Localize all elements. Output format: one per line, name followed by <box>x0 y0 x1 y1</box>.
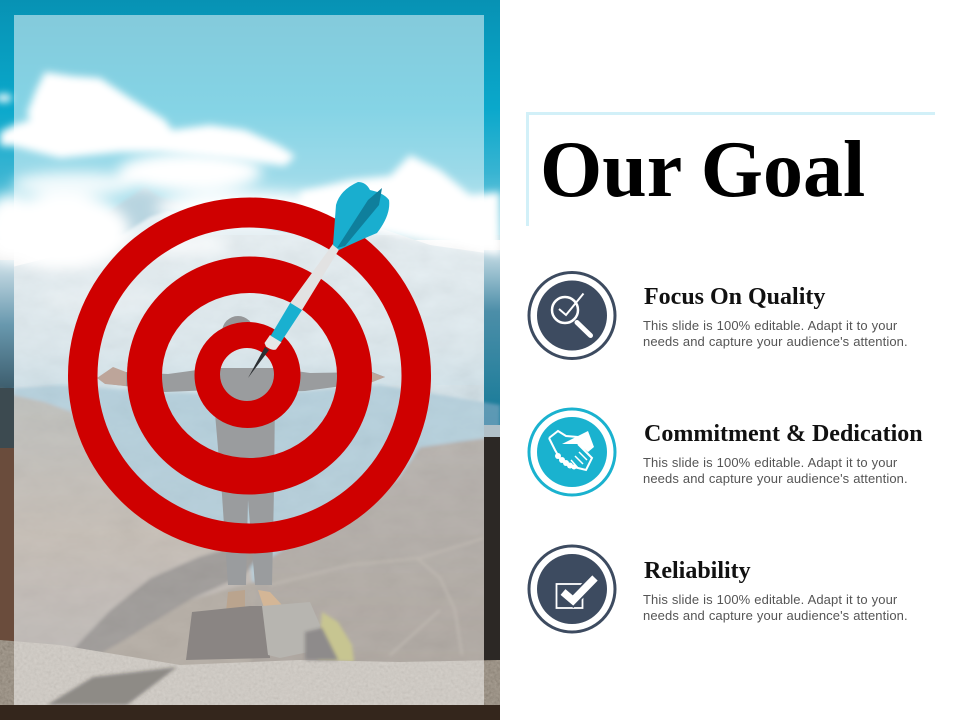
panel: mountain photo with target <box>0 0 500 720</box>
text: focus on quality description: needs and capture your audience's attention. <box>643 334 908 349</box>
heading: commitment and dedication: Commitment & Dedication <box>644 421 923 447</box>
photo: clouds <box>0 72 500 314</box>
icon: handshake <box>528 408 616 496</box>
photo: rocky ground <box>0 640 500 720</box>
icon: magnifier with check <box>528 271 616 360</box>
text: commitment description: This slide is 100% editable. Adapt it to your <box>643 455 897 470</box>
heading: reliability: Reliability <box>644 558 751 584</box>
translucent white overlay <box>14 15 484 705</box>
photo: person <box>97 316 385 612</box>
photo: sky <box>0 0 500 240</box>
photo: ground texture <box>0 640 500 705</box>
photo: trail on hill <box>270 538 484 655</box>
photo: lower landscape <box>0 385 500 680</box>
photo: ground shadow <box>47 667 177 705</box>
photo: hillside mottling <box>14 385 484 665</box>
photo: edge dark strips <box>0 388 500 662</box>
text: focus on quality description <box>643 318 908 349</box>
photo: dry grass <box>318 612 354 662</box>
text: reliability description: needs and capture your audience's attention. <box>643 608 908 623</box>
title: Our Goal <box>540 126 865 214</box>
text: reliability description: This slide is 100% editable. Adapt it to your <box>643 592 897 607</box>
text: reliability description <box>643 592 908 623</box>
heading: focus on quality: Focus On Quality <box>644 284 825 310</box>
icon: checkbox <box>528 544 616 634</box>
text: focus on quality description: This slide is 100% editable. Adapt it to your <box>643 318 897 333</box>
target: concentric red rings <box>68 197 431 553</box>
photo: snowy mountains <box>0 187 500 440</box>
text: commitment description <box>643 455 908 486</box>
photo: dark foreground strip <box>0 705 500 720</box>
text: commitment description: needs and capture your audience's attention. <box>643 471 908 486</box>
dart <box>248 182 389 378</box>
photo: rock pedestal <box>186 602 338 660</box>
